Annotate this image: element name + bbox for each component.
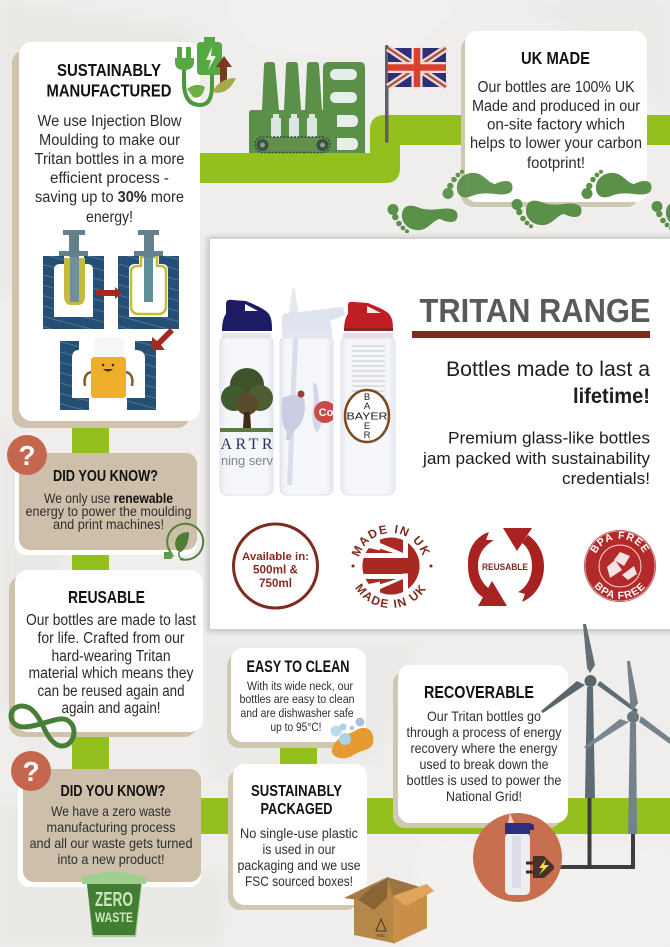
heading: did you know: DID YOU KNOW? (60, 783, 166, 800)
diagram: injection blow moulding process (43, 230, 179, 410)
icon: leaf plug (164, 524, 203, 560)
product: navy bottle: ning serv (221, 453, 274, 468)
text: easy to clean body (240, 679, 354, 734)
text: reusable body (26, 612, 197, 717)
text: reusable body: material which means they (28, 665, 194, 682)
icon: plug, battery and leaves (175, 37, 236, 105)
icon: infinity (11, 706, 74, 746)
icon: zero waste bin: WASTE (95, 909, 133, 925)
panel: Tritan range (204, 234, 670, 634)
badge: made in UK: MADE IN UK (355, 583, 426, 608)
text: injection blow moulding: efficient process - (50, 170, 169, 187)
badge: BPA free (584, 530, 656, 602)
text: recoverable body: recovery where the energy (410, 740, 558, 756)
text: renewable energy: and print machines! (53, 516, 164, 532)
text: reusable body: for life. Crafted from our (38, 630, 184, 647)
badge: available sizes: Available in: (242, 551, 309, 563)
text: UK made body: Our bottles are 100% UK (478, 79, 635, 96)
product: red bottle (341, 302, 395, 495)
icon: bottle in circle with plug (473, 813, 562, 902)
panel: UK made (461, 31, 647, 207)
icon: zero waste bin (82, 872, 146, 937)
text: injection blow moulding: We use Injection Blow (38, 113, 182, 130)
text: UK made body: Made and produced in our (472, 98, 640, 115)
text: easy to clean body: and are dishwasher safe (240, 706, 354, 720)
icon: cardboard box (344, 877, 434, 944)
green path: lower band (195, 798, 670, 834)
heading: sustainably manufactured: MANUFACTURED (46, 80, 172, 100)
rule under title (412, 331, 650, 338)
text: easy to clean body: bottles are easy to clean (240, 692, 354, 706)
product: red bottle: R (364, 430, 371, 441)
product: white straw bottle (280, 288, 345, 495)
arrow: step two to step three (152, 328, 174, 350)
badge: available sizes (234, 524, 318, 608)
icon: wind turbines (541, 624, 670, 867)
product: red bottle: B (364, 392, 370, 403)
text: UK made body: footprint! (527, 155, 585, 172)
heading: sustainably manufactured (46, 60, 172, 100)
arrow: step one to step two (96, 287, 122, 299)
text: UK made body: helps to lower your carbon (470, 135, 642, 152)
text: zero waste (30, 803, 192, 867)
text: injection blow moulding (34, 113, 184, 226)
text: zero waste: into a new product! (58, 851, 164, 867)
text: reusable body: hard-wearing Tritan (52, 648, 170, 665)
text: premium description: credentials! (562, 470, 650, 488)
tagline (446, 357, 650, 408)
product: navy bottle: ARTR (220, 436, 273, 453)
text: packaged body (238, 825, 361, 889)
icon: question mark: ? (18, 440, 36, 471)
heading: sustainably manufactured: SUSTAINABLY (57, 60, 161, 80)
text: UK made body: on-site factory which (487, 116, 625, 134)
panel: did you know renewable (7, 435, 197, 555)
text: recoverable body: used to break down the (420, 756, 549, 772)
green path: left vertical band (72, 410, 109, 780)
panel: did you know zero waste (11, 751, 201, 887)
heading: did you know: DID YOU KNOW? (53, 468, 158, 485)
panel: easy to clean (227, 648, 366, 748)
text: injection blow moulding: Moulding to make our (39, 132, 180, 149)
product: white straw bottle: Co (319, 407, 334, 419)
panel: recoverable (393, 665, 568, 828)
text: easy to clean body: With its wide neck, our (247, 679, 353, 693)
text: zero waste: and all our waste gets turned (30, 835, 192, 851)
icon: factory (249, 62, 365, 153)
text: recoverable body: bottles is used to power the (406, 772, 562, 788)
text: renewable energy: energy to power the moulding (26, 503, 192, 519)
text: packaged body: packaging and we use (238, 857, 361, 873)
badge: BPA free: BPA FREE (594, 582, 646, 600)
badge: BPA free: BPA FREE (590, 532, 650, 554)
text: renewable energy (26, 490, 192, 532)
icon: union flag (385, 45, 446, 143)
heading: reusable: REUSABLE (68, 587, 145, 607)
tagline: Bottles made to last a (446, 357, 650, 381)
text: reusable body: again and again! (62, 700, 160, 717)
icon: cardboard box: FSC (376, 933, 386, 938)
text: zero waste: manufacturing process (46, 819, 176, 835)
icon: sponge with bubbles (330, 718, 373, 758)
product: navy bottle (220, 300, 274, 495)
panel: sustainably manufactured (12, 42, 200, 428)
text: packaged body: FSC sourced boxes! (245, 873, 353, 889)
text: reusable body: Our bottles are made to last (26, 612, 197, 629)
text: packaged body: is used in our (262, 841, 336, 857)
text: premium description (422, 430, 651, 488)
product: red bottle: E (364, 421, 370, 432)
text: premium description: Premium glass-like bottles (448, 430, 650, 448)
footprints trail (388, 170, 670, 233)
text: injection blow moulding: energy! (86, 209, 133, 226)
badge: reusable arrows (468, 528, 544, 606)
text: recoverable body: through a process of energy (406, 724, 562, 740)
green path: connector to packaged card (280, 740, 317, 770)
heading: sustainably packaged (251, 783, 343, 818)
text: UK made body (470, 79, 642, 172)
icon: question mark: ? (22, 756, 40, 787)
badge: available sizes: 500ml & (253, 564, 298, 576)
panel: sustainably packaged (228, 764, 367, 910)
text: renewable energy: We only use renewable (44, 490, 173, 506)
badge: available sizes: 750ml (259, 578, 292, 590)
icon: zero waste bin: ZERO (95, 889, 133, 911)
product: red bottle: BAYER (346, 412, 388, 422)
icon: question mark (11, 751, 51, 791)
text: recoverable body: National Grid! (446, 788, 522, 804)
text: packaged body: No single-use plastic (240, 825, 358, 841)
heading: sustainably packaged: SUSTAINABLY (251, 783, 343, 800)
text: zero waste: We have a zero waste (51, 803, 171, 819)
text: injection blow moulding: Tritan bottles in a more (34, 151, 184, 168)
heading: easy to clean: EASY TO CLEAN (246, 658, 350, 676)
badge: reusable arrows: REUSABLE (482, 562, 528, 573)
title: Tritan Range: TRITAN RANGE (420, 293, 650, 330)
heading: sustainably packaged: PACKAGED (260, 801, 332, 818)
icon: question mark (7, 435, 47, 475)
tagline: lifetime! (573, 385, 650, 408)
badge: made in UK (352, 525, 432, 608)
green path: top band (195, 115, 670, 183)
heading: recoverable: RECOVERABLE (424, 682, 534, 702)
text: recoverable body: Our Tritan bottles go (427, 708, 541, 724)
text: reusable body: can be reused again and (38, 683, 184, 700)
text: easy to clean body: up to 95°C! (270, 720, 322, 734)
product: red bottle: A (364, 401, 371, 412)
text: injection blow moulding: saving up to 30% more (35, 189, 184, 206)
text: recoverable body (406, 708, 562, 804)
heading: UK made: UK MADE (521, 48, 590, 68)
panel: reusable (9, 570, 203, 737)
text: premium description: jam packed with sustainability (422, 450, 651, 468)
badge: made in UK: MADE IN UK (352, 525, 430, 557)
